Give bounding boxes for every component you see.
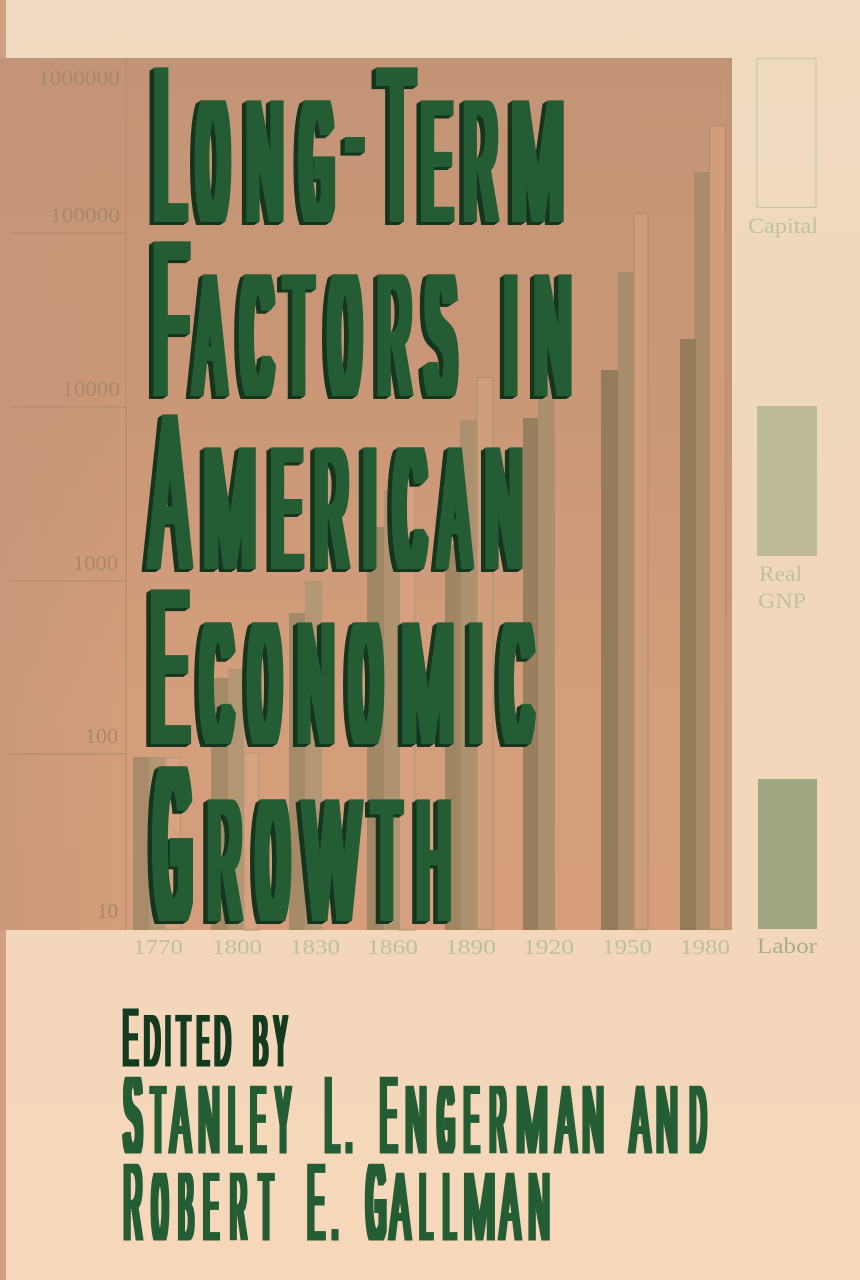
x axis year labels: 1920 (523, 935, 574, 959)
editor names line 2: A (390, 1152, 410, 1261)
x axis year labels: 1980 (680, 935, 730, 959)
edited by: E (123, 990, 138, 1084)
title line 1: L (154, 21, 186, 269)
title line 3: A (440, 411, 470, 605)
title line 5: G (155, 706, 191, 982)
x axis year labels: 1770 (133, 935, 183, 959)
title line 1: O (197, 52, 229, 271)
editor names line 2: E (308, 1141, 324, 1263)
y axis labels: 10000 (62, 377, 120, 401)
legend: real GNP (757, 406, 817, 613)
editor names line 1: D (690, 1065, 706, 1174)
y axis labels: 1000 (73, 551, 118, 575)
editor names line 1: N (405, 1065, 427, 1174)
x axis year labels: 1890 (445, 935, 496, 959)
y axis labels: 1000000 (38, 66, 120, 90)
y axis labels: 10 (97, 899, 118, 923)
title line 2 (148, 241, 572, 399)
editor names line 2: G (366, 1134, 386, 1270)
edited by: I (166, 1001, 170, 1083)
editor names line 1: G (438, 1059, 454, 1180)
title line 3 (142, 414, 523, 572)
editor names line 2: R (124, 1141, 142, 1263)
edited by: D (214, 1001, 231, 1083)
editor names line 2: . (332, 1152, 351, 1261)
y axis labels: 100000 (50, 203, 120, 227)
title line 2: C (241, 226, 273, 445)
y axis labels: 100 (85, 724, 118, 748)
edited by (123, 990, 287, 1084)
title line 1: N (247, 64, 283, 258)
editor names line 1 (122, 1076, 708, 1154)
legend: capital: Capital (748, 213, 818, 238)
title line 1: - (347, 34, 362, 228)
bars: 1980 (680, 58, 732, 930)
editor names line 1: A (630, 1065, 650, 1174)
title line 2: O (329, 226, 361, 445)
title line 1: T (379, 21, 414, 269)
editor names line 2: A (500, 1152, 520, 1261)
title line 4 (146, 589, 536, 747)
editor names line 1: N (656, 1065, 678, 1174)
panel: chart background (0, 58, 732, 930)
title line 4: O (249, 574, 281, 793)
title line 3: A (151, 368, 189, 616)
bars: 1920 (523, 385, 555, 930)
left edge strip (0, 0, 6, 1280)
title line 5: TH (373, 763, 450, 957)
editor names line 2: M (463, 1152, 496, 1261)
editor names (122, 1076, 708, 1240)
title line 3: M (203, 411, 257, 605)
editor names line 1: N (582, 1065, 604, 1174)
title line 2: R (378, 238, 411, 432)
editor names line 1: ER (464, 1065, 506, 1174)
editor names line 1: A (556, 1065, 576, 1174)
title line 3: C (394, 399, 426, 618)
title line 2: S (426, 226, 456, 445)
x axis year labels: 1800 (212, 935, 262, 959)
title line 1 (150, 67, 564, 225)
x axis year labels: 1830 (290, 935, 340, 959)
bars: 1950 (601, 214, 648, 930)
title line 2: N (535, 238, 571, 432)
editor names line 2: O (152, 1146, 168, 1267)
edited by: Y (274, 1001, 287, 1083)
y axis labels (38, 66, 120, 923)
title line 1: ER (422, 64, 497, 258)
title (151, 21, 571, 982)
editor names line 2: LL (420, 1152, 456, 1261)
legend: labor: Labor (757, 933, 818, 958)
editor names line 1: S (124, 1047, 142, 1183)
edited by: E (197, 1001, 209, 1083)
title line 3: ERI (272, 411, 376, 605)
title line 4: C (501, 574, 533, 793)
title line 2: I (468, 238, 517, 432)
title line 1: M (511, 64, 564, 258)
edited by: D (144, 1001, 160, 1083)
bars: 1890 (445, 378, 493, 930)
title line 2: T (285, 238, 313, 432)
editor names line 1: T (151, 1065, 165, 1174)
title line 2: F (153, 195, 188, 443)
title line 4: E (151, 543, 189, 791)
bars: 1800 (211, 669, 258, 930)
title line 5: R (208, 763, 241, 957)
title line 4: C (201, 574, 233, 793)
editor names line 1: N (198, 1065, 220, 1174)
title line 4: O (350, 574, 382, 793)
legend (748, 58, 818, 958)
title line 5: O (257, 751, 289, 970)
bars: 1830 (289, 581, 322, 930)
editor names line 2: N (528, 1152, 550, 1261)
edited by: T (177, 1001, 190, 1083)
bar chart (133, 58, 732, 930)
title line 4: I (470, 586, 482, 780)
legend: real GNP: Real (759, 561, 802, 586)
x axis year labels: 1950 (602, 935, 652, 959)
editor names line 1: E (380, 1054, 397, 1176)
editor names line 1: LEY (229, 1065, 305, 1174)
editor names line 2: BERT (179, 1152, 289, 1261)
x axis year labels (133, 935, 730, 959)
bars: 1770 (133, 757, 180, 930)
editor names line 1: L (325, 1054, 339, 1176)
editor names line 1: A (170, 1065, 191, 1174)
y axis with gridlines (10, 58, 126, 930)
legend: real GNP: GNP (758, 588, 806, 613)
title line 5 (148, 766, 451, 924)
title line 5: W (304, 763, 360, 957)
legend: capital (748, 58, 818, 238)
bars: 1860 (367, 463, 415, 930)
x axis year labels: 1860 (367, 935, 418, 959)
edited by: B (253, 1001, 268, 1083)
editor names line 1: . (346, 1065, 365, 1174)
title line 1: G (301, 52, 333, 271)
legend: labor (757, 779, 818, 958)
title line 2: A (195, 238, 225, 432)
title line 4: M (401, 586, 455, 780)
title line 3: N (486, 411, 522, 605)
editor names line 2 (123, 1164, 550, 1240)
editor names line 1: M (516, 1065, 548, 1174)
title line 4: N (298, 586, 334, 780)
